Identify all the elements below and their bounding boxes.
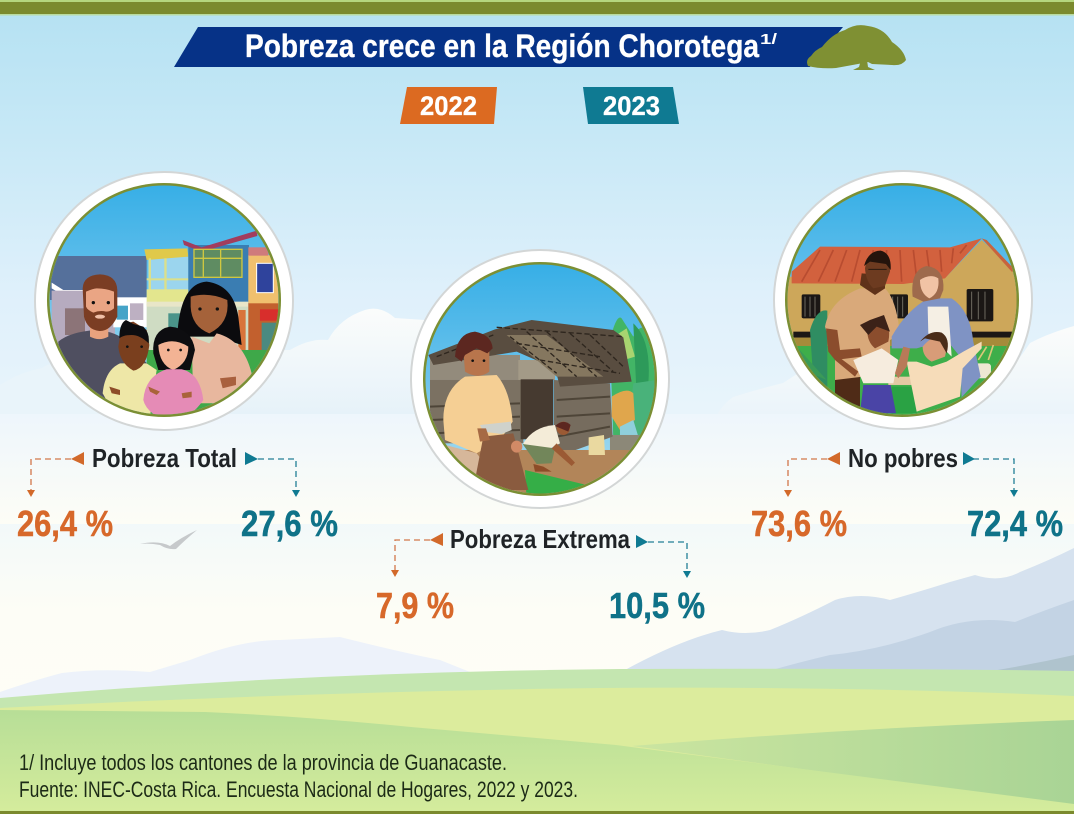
arrow: 2023 [963, 452, 1018, 497]
legend 2023 [583, 87, 679, 124]
mountains right [625, 548, 1074, 680]
value: 73,6 %: 73,6 % [751, 503, 847, 544]
arrow: 2022 [784, 452, 840, 497]
panel: pobreza extrema photo [411, 250, 669, 508]
value: 10,5 %: 10,5 % [609, 585, 705, 626]
title banner: Pobreza crece en la Región Chorotega [245, 28, 759, 64]
panel: no pobres photo [774, 171, 1032, 429]
footnote [19, 750, 578, 802]
label: Pobreza Total: Pobreza Total [92, 443, 237, 473]
legend 2022 [400, 87, 497, 124]
arrow: 2023 [245, 452, 300, 497]
bottom bar [0, 811, 1074, 814]
legend 2023: 2023 [603, 91, 660, 121]
panel: pobreza total photo [35, 172, 293, 430]
label: Pobreza Extrema [391, 524, 691, 578]
footnote: Fuente: INEC-Costa Rica. Encuesta Nacional de Hogares, 2022 y 2023. [19, 777, 578, 802]
label: No pobres: No pobres [848, 443, 958, 473]
top bar [0, 0, 1074, 16]
hills [0, 669, 1074, 814]
clouds [0, 309, 1074, 524]
value: 7,9 %: 7,9 % [376, 585, 454, 626]
value: 27,6 %: 27,6 % [241, 503, 338, 544]
arrow: 2023 [636, 535, 691, 578]
bird [140, 530, 197, 549]
icon: tree [807, 25, 906, 70]
label: Pobreza Total [27, 443, 300, 497]
title banner: 1/ [760, 31, 778, 48]
arrow: 2022 [391, 533, 443, 577]
value: 26,4 %: 26,4 % [17, 503, 113, 544]
footnote: 1/ Incluye todos los cantones de la provincia de Guanacaste. [19, 750, 507, 775]
legend 2022: 2022 [420, 91, 477, 121]
label: No pobres [784, 443, 1018, 497]
mountains left [0, 637, 470, 700]
arrow: 2022 [27, 452, 84, 497]
label: Pobreza Extrema: Pobreza Extrema [450, 524, 630, 554]
